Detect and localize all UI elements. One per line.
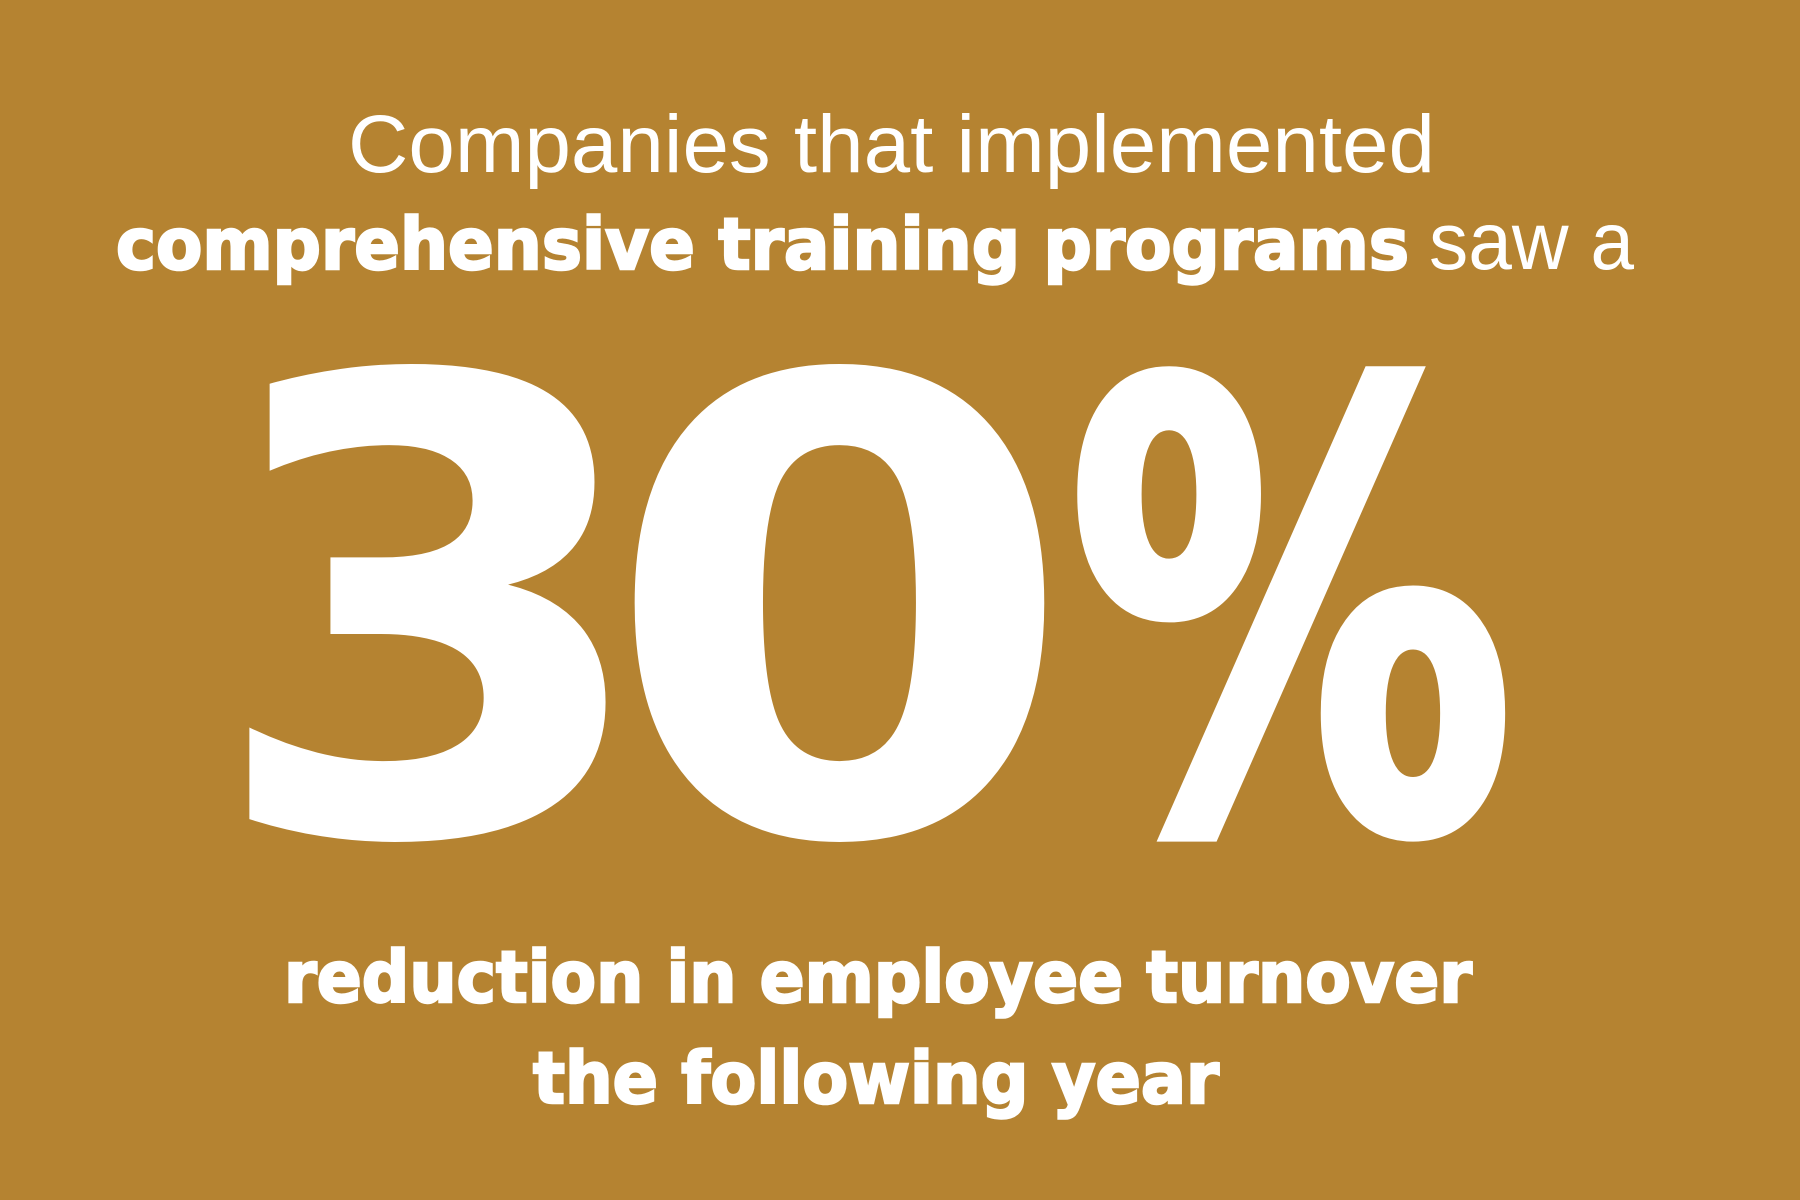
intro line 2: saw a	[1429, 196, 1634, 287]
big statistic: 30%: %	[1068, 259, 1514, 970]
intro text block	[116, 99, 1634, 287]
closing line 1: reduction in employee turnover	[284, 936, 1472, 1019]
intro line 1: Companies that implemented	[348, 99, 1435, 190]
closing line 2: the following year	[533, 1037, 1219, 1120]
big statistic: 30%: 3	[206, 247, 657, 982]
intro line 2: comprehensive training programs	[116, 203, 1409, 286]
closing text block	[284, 936, 1472, 1120]
big statistic: 30%	[206, 247, 1514, 983]
big statistic: 30%: 0	[602, 247, 1077, 983]
